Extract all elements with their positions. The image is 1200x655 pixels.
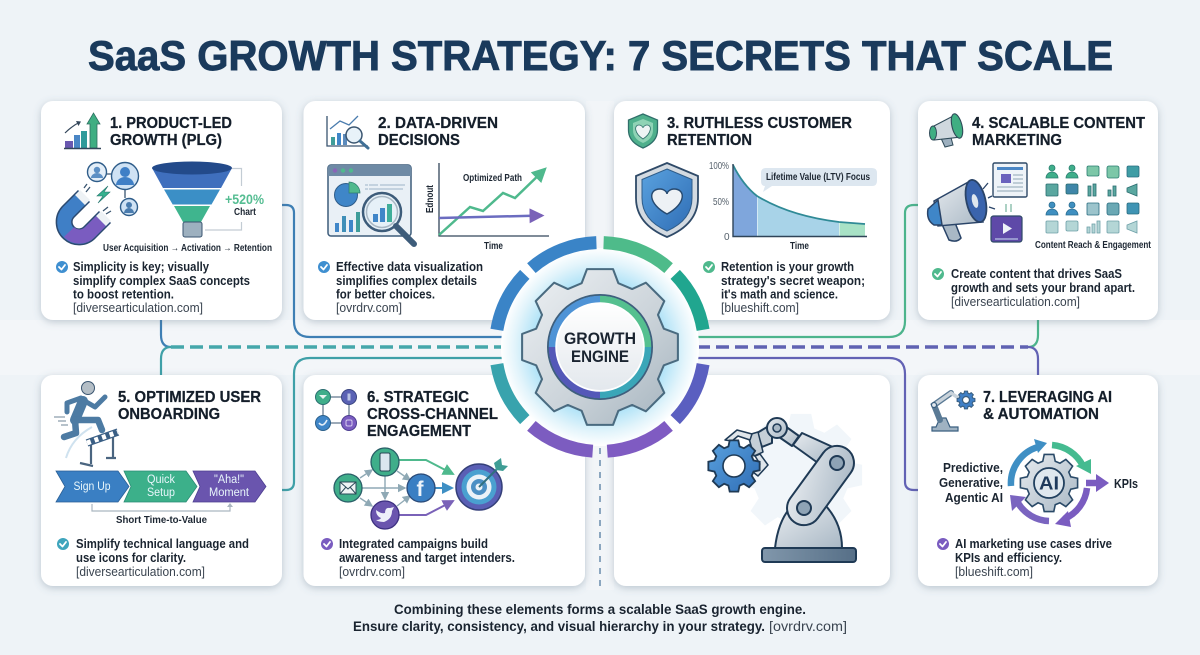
heading: RETENTION: [667, 132, 752, 149]
progress ring: [548, 295, 652, 399]
icon: large megaphone: [928, 178, 995, 241]
label: +520% chart: Chart: [234, 207, 257, 218]
icon: small shield: [628, 114, 658, 148]
pale gear backdrop: [740, 414, 862, 536]
text block: Integrated campaigns build: [339, 537, 488, 551]
segmented outer ring: [497, 243, 703, 451]
heading: 4. SCALABLE CONTENT: [972, 115, 1146, 132]
panel: 3 customer retention: [614, 101, 890, 320]
text block: [diversearticulation.com]: [76, 565, 205, 579]
panel: 7 AI and automation: [918, 375, 1158, 586]
heading: & AUTOMATION: [983, 406, 1099, 423]
text block: [76, 537, 249, 579]
icon: check: [703, 261, 715, 273]
connectors: left side: [161, 205, 503, 490]
icon: large shield with heart: [636, 163, 698, 237]
process chevrons: Moment: [209, 487, 250, 499]
label: AI types: Generative,: [939, 476, 1003, 490]
heading: DECISIONS: [378, 132, 460, 149]
line chart: optimized path: Optimized Path: [463, 173, 522, 184]
label: funnel stages: User Acquisition → Activation → Retention: [103, 243, 272, 254]
icon grid: channels: [1046, 165, 1139, 233]
hub label: GROWTH: [564, 330, 636, 348]
panel: 4 content marketing: [918, 101, 1158, 320]
bracket: short time-to-value: Short Time-to-Value: [116, 515, 207, 526]
network diagram: [334, 448, 508, 529]
label: AI types: [939, 461, 1003, 505]
area chart: retention curve: 100%: [709, 161, 729, 172]
heading: [367, 389, 498, 440]
hub label: ENGINE: [571, 348, 629, 366]
footer note: Combining these elements forms a scalable SaaS growth engine.: [394, 601, 806, 617]
icon: check: [321, 538, 333, 550]
panel: 1 product-led growth: [41, 101, 282, 320]
icon: facebook: [407, 474, 435, 502]
text block: simplifies complex details: [336, 274, 477, 288]
heading: [972, 115, 1146, 149]
text block: KPIs and efficiency.: [955, 551, 1062, 565]
text block: growth and sets your brand apart.: [951, 281, 1135, 295]
footer note: [ovrdrv.com]: [769, 618, 847, 634]
text block: Effective data visualization: [336, 260, 483, 274]
text block: use icons for clarity.: [76, 551, 186, 565]
area chart: retention curve: 50%: [713, 197, 729, 208]
text block: [951, 267, 1135, 309]
cycle diagram: AI gear with arrows: AI: [1039, 474, 1059, 494]
heading: 5. OPTIMIZED USER: [118, 389, 261, 406]
process chevrons: Quick: [147, 474, 175, 486]
text block: [diversearticulation.com]: [73, 301, 203, 315]
text block: [721, 260, 865, 315]
panel: robot arm illustration: [614, 375, 890, 586]
text block: [diversearticulation.com]: [951, 295, 1080, 309]
heading: [983, 389, 1112, 423]
icon: check: [937, 538, 949, 550]
heading: 7. LEVERAGING AI: [983, 389, 1112, 406]
connector: bottom dashed line: [599, 448, 601, 592]
heading: [667, 115, 852, 149]
funnel chart: [152, 162, 242, 237]
gear: [522, 269, 678, 425]
icon: magnet attracting users: [64, 162, 138, 237]
icon: check: [932, 268, 944, 280]
line chart: optimized path: Ednout: [425, 184, 436, 213]
dashboard with magnifier: [328, 165, 414, 244]
process chevrons: "Aha!": [214, 474, 244, 486]
area chart: retention curve: 0: [724, 232, 730, 243]
heading: ONBOARDING: [118, 406, 220, 423]
text block: [336, 260, 483, 315]
text block: [ovrdrv.com]: [339, 565, 405, 579]
heading: 6. STRATEGIC: [367, 389, 469, 406]
footer note: Ensure clarity, consistency, and visual hierarchy in your strategy.: [353, 618, 765, 634]
text block: [73, 260, 250, 315]
heading: [378, 115, 498, 149]
icon: blue gear held by arm: [708, 440, 760, 492]
text block: [ovrdrv.com]: [336, 301, 402, 315]
heading: MARKETING: [972, 132, 1062, 149]
connectors: right side: [697, 205, 1038, 490]
icon: growth bars: [64, 113, 101, 148]
panel: 2 data-driven decisions: [304, 101, 585, 320]
robot arm: [725, 418, 861, 562]
callout: lifetime value: [761, 168, 877, 192]
title: SaaS GROWTH STRATEGY: 7 SECRETS THAT SCALE: [88, 32, 1113, 79]
text block: strategy's secret weapon;: [721, 274, 865, 288]
icon: mail: [334, 474, 362, 502]
heading: 1. PRODUCT-LED: [110, 115, 232, 132]
heading: ENGAGEMENT: [367, 423, 471, 440]
heading: GROWTH (PLG): [110, 132, 222, 149]
bracket: short time-to-value: [92, 503, 233, 526]
text block: [339, 537, 515, 579]
text block: Create content that drives SaaS: [951, 267, 1122, 281]
heading: 2. DATA-DRIVEN: [378, 115, 498, 132]
text block: AI marketing use cases drive: [955, 537, 1112, 551]
text block: to boost retention.: [73, 288, 174, 302]
icon: article page: [993, 163, 1027, 197]
hub label: [564, 330, 636, 366]
hub: growth engine: [497, 243, 703, 451]
text block: awareness and target intenders.: [339, 551, 515, 565]
process chevrons: Setup: [147, 487, 175, 499]
heading: CROSS-CHANNEL: [367, 406, 498, 423]
label: +520% chart: [225, 191, 264, 218]
icon: bird: [371, 501, 399, 529]
icon: phone: [371, 448, 399, 476]
area chart: retention curve: Time: [790, 241, 809, 252]
text block: Simplicity is key; visually: [73, 260, 209, 274]
icon: video player: [991, 204, 1022, 242]
icon: small megaphone: [930, 113, 965, 147]
callout: lifetime value: Lifetime Value (LTV) Focus: [766, 172, 870, 183]
label: AI types: Predictive,: [943, 461, 1003, 475]
icon: channel network: [316, 390, 356, 430]
heading: [110, 115, 232, 149]
line chart: optimized path: [425, 163, 549, 252]
label: +520% chart: +520%: [225, 191, 264, 207]
icon: runner over hurdle: [54, 382, 118, 466]
icon: check: [318, 261, 330, 273]
process chevrons: Sign Up: [74, 481, 110, 493]
text block: Simplify technical language and: [76, 537, 249, 551]
icon: check: [57, 538, 69, 550]
text block: [blueshift.com]: [721, 301, 799, 315]
area chart: retention curve: [709, 161, 867, 252]
heading: [118, 389, 261, 423]
line chart: optimized path: Time: [484, 241, 503, 252]
text block: Retention is your growth: [721, 260, 854, 274]
glow disc: [501, 248, 699, 446]
panel: 5 user onboarding: [41, 375, 282, 586]
text block: [955, 537, 1112, 579]
text block: it's math and science.: [721, 288, 838, 302]
footer note: [353, 601, 847, 634]
text block: [blueshift.com]: [955, 565, 1033, 579]
icon: check: [56, 261, 68, 273]
icon: chart and magnifier: [327, 116, 368, 148]
label: reach and engagement: Content Reach & Engagement: [1035, 240, 1152, 251]
icon: facebook: f: [416, 478, 424, 501]
panel: 6 cross-channel engagement: [304, 375, 585, 586]
label: AI types: Agentic AI: [945, 491, 1003, 505]
text block: simplify complex SaaS concepts: [73, 274, 250, 288]
icon: small robot arm: [932, 391, 975, 431]
heading: 3. RUTHLESS CUSTOMER: [667, 115, 852, 132]
label: KPIs: KPIs: [1114, 477, 1138, 491]
cycle diagram: AI gear with arrows: [1010, 439, 1109, 527]
text block: for better choices.: [336, 288, 435, 302]
icon: target: [456, 458, 508, 510]
process chevrons: [56, 471, 266, 502]
